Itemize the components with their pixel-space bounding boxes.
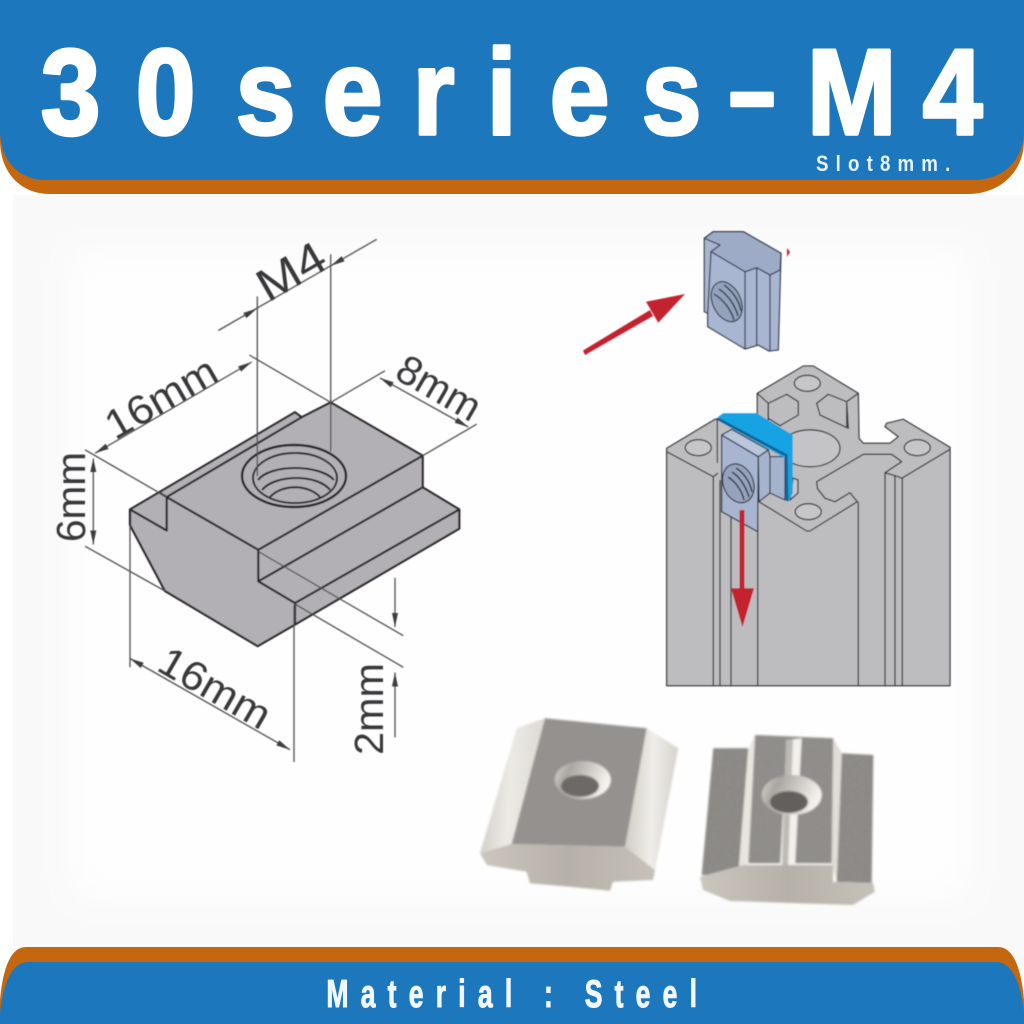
dimension labels: M4 xyxy=(247,231,335,312)
blue highlight piece xyxy=(718,413,793,502)
small T-nut xyxy=(704,232,781,351)
header banner xyxy=(0,0,1024,194)
title: – xyxy=(729,23,775,159)
dimension labels xyxy=(48,231,489,755)
material label: Material : Steel xyxy=(326,973,697,1016)
title: M4 xyxy=(807,25,983,161)
dimension arrowheads xyxy=(90,256,468,750)
dimension labels: 6mm xyxy=(48,452,94,542)
product photo: nut top view xyxy=(480,718,678,891)
title xyxy=(41,23,983,161)
red arrow: slide down xyxy=(731,510,754,627)
installation diagram xyxy=(583,232,950,686)
footer banner xyxy=(0,947,1024,1024)
dimension labels: 2mm xyxy=(346,663,392,755)
product photo: nut slot view xyxy=(700,735,875,905)
nut seated in slot xyxy=(717,418,785,532)
aluminium extrusion xyxy=(667,366,950,686)
dimension labels: 16mm xyxy=(97,347,225,448)
nut body xyxy=(130,402,459,646)
dimension drawing of T-nut xyxy=(48,231,489,762)
dimension labels: 8mm xyxy=(389,345,489,430)
title: 30series xyxy=(41,25,701,161)
subtitle: slot size: Slot8mm. xyxy=(816,153,950,176)
dimension lines xyxy=(85,239,477,762)
dimension labels: 16mm xyxy=(151,637,279,738)
threaded hole xyxy=(242,445,346,507)
red arrow: insert xyxy=(583,248,790,355)
